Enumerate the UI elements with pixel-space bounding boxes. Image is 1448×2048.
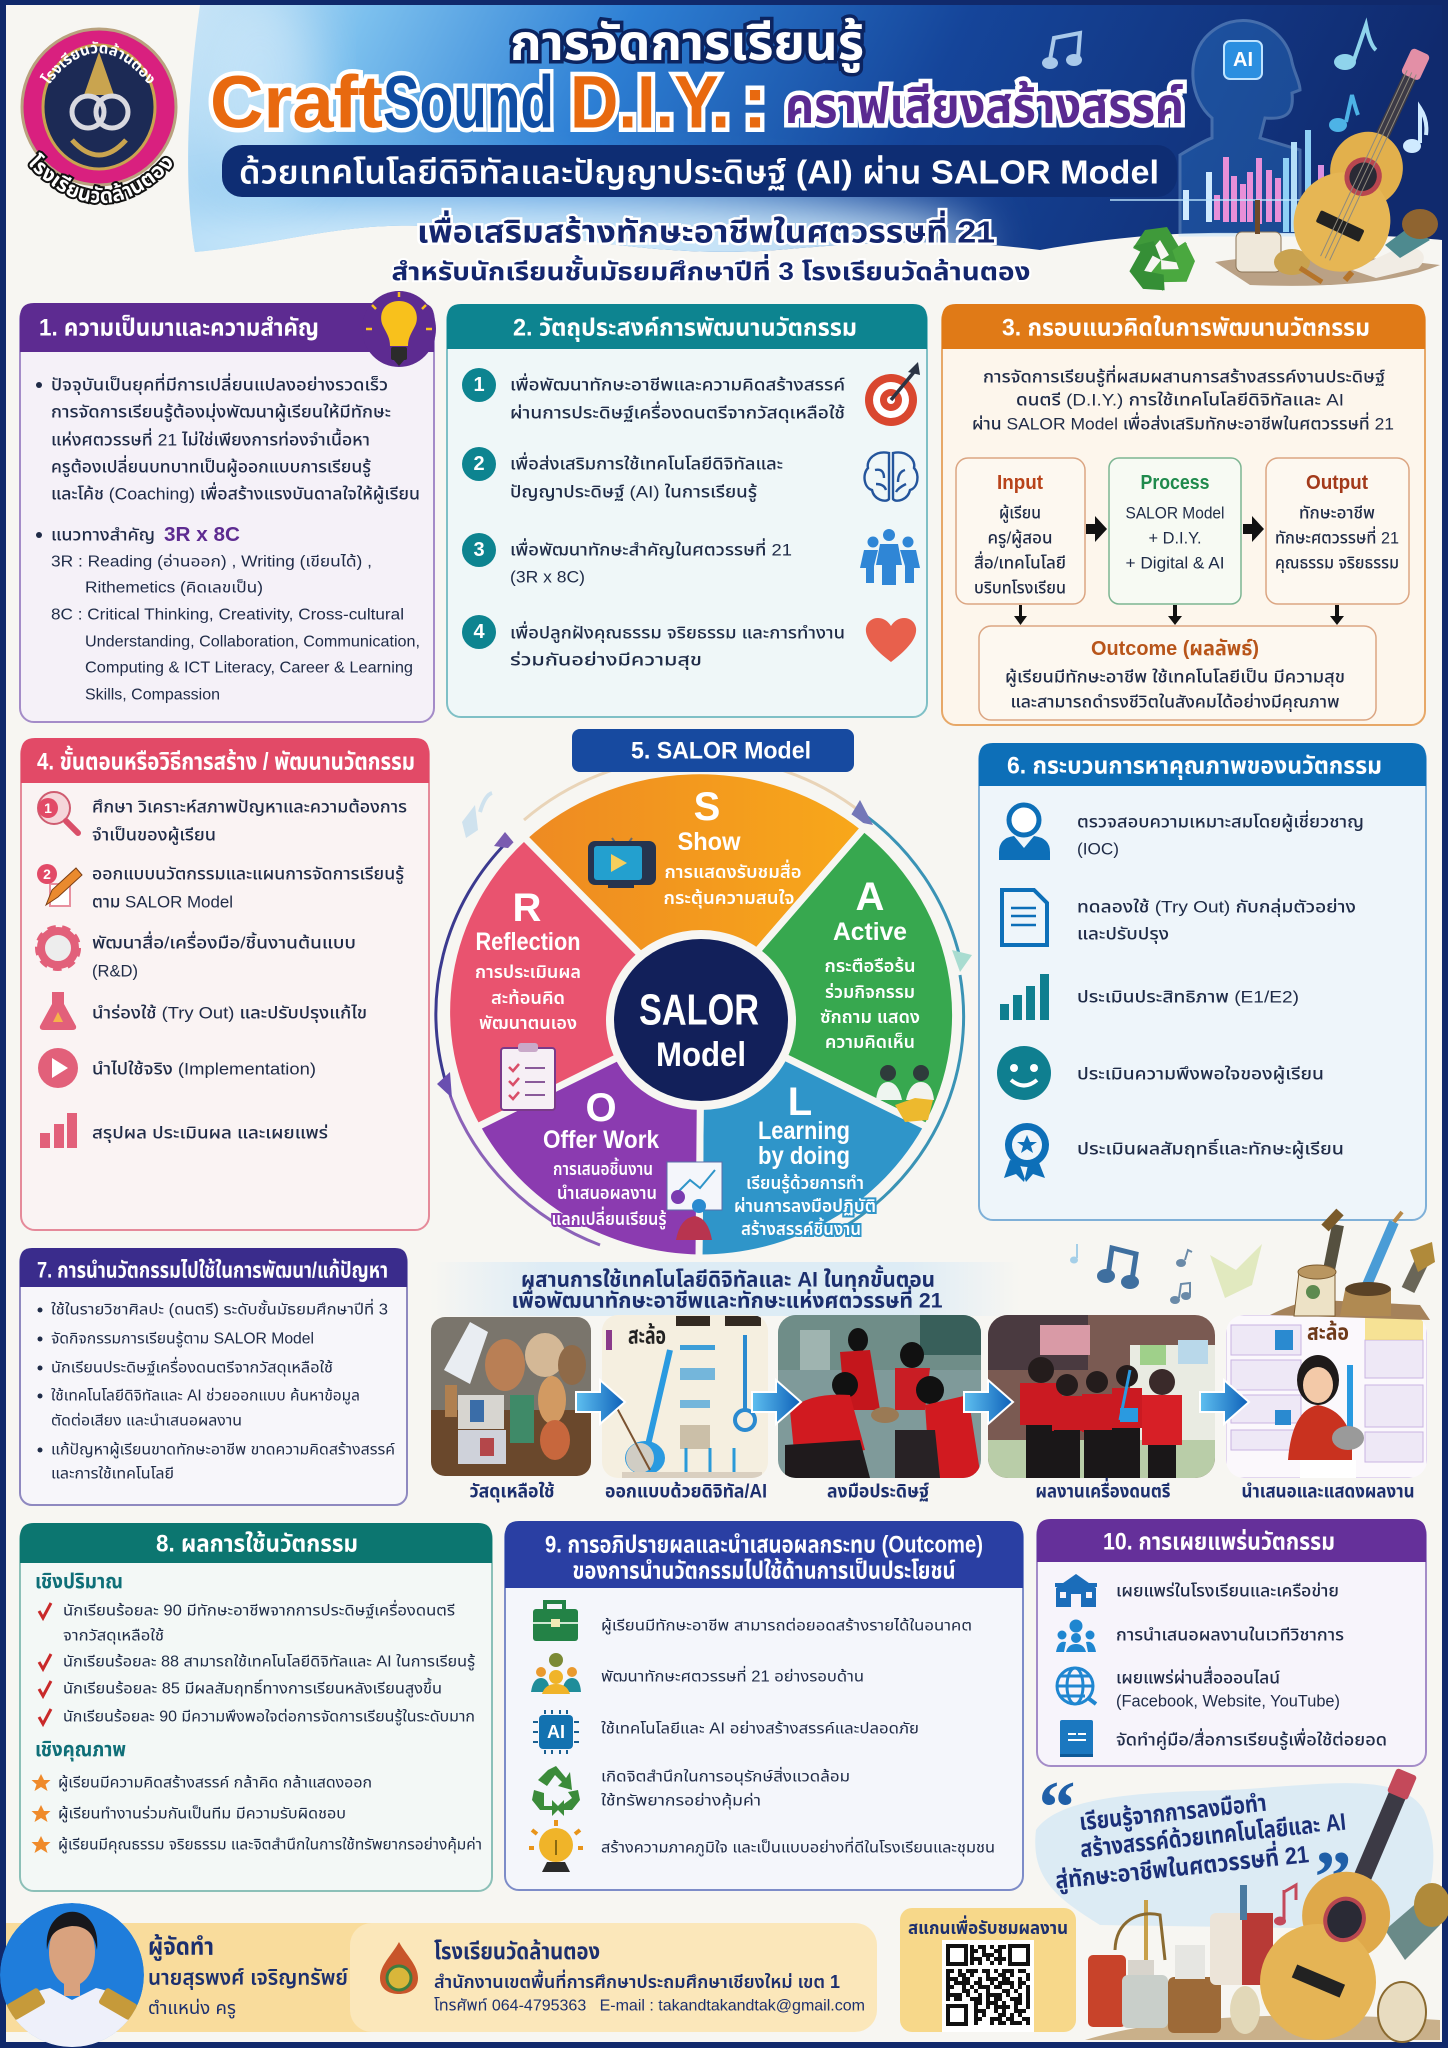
process box: + Digital & AI: [1126, 554, 1224, 572]
item presentation: [1056, 1620, 1344, 1652]
wedge O: Offer Work: Offer Work: [543, 1126, 659, 1154]
recycle symbol: [1119, 227, 1204, 301]
output box: ทักษะศตวรรษที่ 21: [1275, 525, 1399, 548]
panel 10 header: [1037, 1519, 1426, 1562]
check 1: [999, 805, 1364, 860]
step 3: (R&D): [92, 962, 138, 980]
qualitative results: ผู้เรียนทำงานร่วมกันเป็นทีม มีความรับผิดชอบ: [58, 1804, 346, 1822]
quantitative results: นักเรียนร้อยละ 90 มีความพึงพอใจต่อการจัดการเรียนรู้ในระดับมาก: [63, 1708, 475, 1726]
input box: ครู/ผู้สอน: [988, 528, 1052, 550]
panel 3 intro: ดนตรี (D.I.Y.) การใช้เทคโนโลยีดิจิทัลและ AI: [1016, 390, 1344, 410]
photo: finished instruments: [988, 1315, 1215, 1478]
wedge R: Reflection: R: [513, 886, 542, 930]
outcome 3: AI: [547, 1722, 565, 1742]
icon: clipboard: [501, 1043, 555, 1110]
wedge L: Learning by doing: ผ่านการลงมือปฏิบัติ: [734, 1196, 876, 1216]
panel 3 intro: ผ่าน SALOR Model เพื่อส่งเสริมทักษะอาชีพในศตวรรษที่ 21: [972, 411, 1394, 434]
QR label: สแกนเพื่อรับชมผลงาน: [908, 1915, 1068, 1938]
wedge A: Active: กระตือรือร้น: [824, 956, 916, 976]
school logo: โรงเรียนวัดล้านตอง: [28, 150, 174, 206]
outcome 4: [532, 1766, 850, 1816]
header background: [188, 5, 1442, 252]
panel 3 intro: [972, 364, 1394, 434]
wedge A: Active: Active: [833, 918, 907, 946]
icon: heart: [866, 618, 916, 662]
wedge O: Offer Work: นำเสนอผลงาน: [557, 1183, 657, 1203]
center hub: SALOR: [639, 986, 759, 1034]
panel 2 header: [447, 304, 927, 349]
quantitative results: เชิงปริมาณ: [35, 1571, 123, 1593]
maker credit: ผู้จัดทำ: [148, 1932, 214, 1962]
quote area: [1035, 1767, 1433, 1930]
qualitative results: เชิงคุณภาพ: [35, 1739, 126, 1761]
photo: students making: [778, 1315, 981, 1478]
quantitative results: นักเรียนร้อยละ 90 มีทักษะอาชีพจากการประดิษฐ์เครื่องดนตรี: [63, 1600, 455, 1620]
wedge S: Show: Show: [678, 828, 741, 856]
outcome box: ผู้เรียนมีทักษะอาชีพ ใช้เทคโนโลยีเป็น มีความสุข: [1005, 666, 1345, 688]
craft objects: [1215, 200, 1440, 286]
item online: (Facebook, Website, YouTube): [1116, 1692, 1340, 1710]
arrows between steps: [576, 1380, 1249, 1424]
input box: Input: [997, 472, 1043, 494]
panel 7 list: แก้ปัญหาผู้เรียนขาดทักษะอาชีพ ขาดความคิดสร้างสรรค์: [51, 1442, 395, 1458]
wedge A: Active: ร่วมกิจกรรม: [825, 982, 915, 1002]
panel 7 list: จัดกิจกรรมการเรียนรู้ตาม SALOR Model: [51, 1330, 314, 1348]
cycle ring: [436, 756, 964, 1245]
quote marks: [1038, 1767, 1352, 1919]
objective 1: เพื่อพัฒนาทักษะอาชีพและความคิดสร้างสรรค์: [510, 372, 845, 394]
school contact: [434, 1938, 865, 2014]
panel 5 title: 5. SALOR Model: [631, 738, 811, 764]
item presentation: การนำเสนอผลงานในเวทีวิชาการ: [1116, 1625, 1344, 1644]
subtitle line 3: สำหรับนักเรียนชั้นมัธยมศึกษาปีที่ 3 โรงเรียนวัดล้านตอง: [392, 254, 1030, 286]
wedge R: Reflection: สะท้อนคิด: [491, 988, 565, 1008]
icon: brain: [865, 452, 917, 501]
strip captions: วัสดุเหลือใช้: [470, 1481, 554, 1502]
main title: :: [743, 60, 767, 144]
panel 7 header: [20, 1248, 407, 1287]
QR panel: [900, 1908, 1076, 2032]
strip captions: ลงมือประดิษฐ์: [827, 1482, 929, 1502]
panel 7 list: [38, 1298, 395, 1482]
wedge L: Learning by doing: by doing: [758, 1142, 850, 1170]
school contact: สำนักงานเขตพื้นที่การศึกษาประถมศึกษาเชียงใหม่ เขต 1: [434, 1969, 840, 1992]
panel 1 guideline 3R x 8C: 3R x 8C: [164, 524, 240, 546]
main title: Sound: [383, 60, 554, 144]
check 1: (IOC): [1077, 840, 1119, 858]
panel 9 title: ของการนำนวัตกรรมไปใช้ด้านการเป็นประโยชน์: [572, 1556, 956, 1584]
guitar: [1277, 31, 1448, 288]
wedge L: Learning by doing: [699, 1016, 927, 1258]
output box: คุณธรรม จริยธรรม: [1275, 554, 1399, 573]
objective 2: เพื่อส่งเสริมการใช้เทคโนโลยีดิจิทัลและ: [510, 452, 783, 474]
recycled instruments illustration: [1085, 1749, 1448, 2048]
school logo: โรงเรียนวัดล้านตอง: [40, 41, 154, 84]
photo: digital design: [602, 1315, 768, 1478]
panel 1 guideline 3R x 8C: 8C : Critical Thinking, Creativity, Cross-cultural: [51, 606, 404, 624]
step 3: พัฒนาสื่อ/เครื่องมือ/ชิ้นงานต้นแบบ: [92, 930, 356, 952]
outcome box: และสามารถดำรงชีวิตในสังคมได้อย่างมีคุณภาพ: [1010, 692, 1340, 712]
school contact: โทรศัพท์ 064-4795363 E-mail : takandtakandtak@gmail.com: [434, 1998, 865, 2014]
step 2: ตาม SALOR Model: [92, 892, 233, 912]
check 2: ทดลองใช้ (Try Out) กับกลุ่มตัวอย่าง: [1077, 897, 1356, 918]
item manual: จัดทำคู่มือ/สื่อการเรียนรู้เพื่อใช้ต่อยอด: [1116, 1728, 1387, 1752]
panel 6 title: 6. กระบวนการหาคุณภาพของนวัตกรรม: [1007, 752, 1382, 780]
music notes: [1042, 25, 1426, 153]
QR code: [942, 1940, 1034, 2032]
panel 1 guideline 3R x 8C: 3R : Reading (อ่านออก) , Writing (เขียนได้) ,: [51, 552, 372, 570]
wedge A: Active: ความคิดเห็น: [825, 1032, 915, 1052]
objective 3: (3R x 8C): [510, 568, 585, 586]
panel 6: quality process: [979, 743, 1426, 1220]
panel 1 guideline 3R x 8C: แนวทางสำคัญ: [51, 526, 155, 544]
objective 1: [462, 368, 845, 424]
qualitative results: ผู้เรียนมีความคิดสร้างสรรค์ กล้าคิด กล้าแสดงออก: [58, 1774, 372, 1792]
quote marks: ”: [1314, 1837, 1352, 1919]
process box: Process: [1140, 472, 1210, 494]
wedge O: Offer Work: O: [585, 1086, 617, 1130]
strip heading: เพื่อพัฒนาทักษะอาชีพและทักษะแห่งศตวรรษที่ 21: [512, 1285, 943, 1312]
panel 8 title: 8. ผลการใช้นวัตกรรม: [156, 1530, 358, 1558]
step 6: สรุปผล ประเมินผล และเผยแพร่: [92, 1124, 328, 1144]
photo: digital design: สะล้อ: [628, 1322, 666, 1350]
strip captions: ผลงานเครื่องดนตรี: [1036, 1478, 1171, 1502]
quantitative results: นักเรียนร้อยละ 85 มีผลสัมฤทธิ์ทางการเรียนหลังเรียนสูงขึ้น: [63, 1678, 442, 1698]
ring arrowheads: [437, 793, 972, 1098]
quote text: สร้างสรรค์ด้วยเทคโนโลยีและ AI: [1079, 1808, 1347, 1863]
panel 4 title: 4. ขั้นตอนหรือวิธีการสร้าง / พัฒนานวัตกรรม: [37, 745, 415, 776]
panel 1 header: [20, 303, 434, 352]
step 2: 2: [43, 866, 51, 882]
outcome 5: สร้างความภาคภูมิใจ และเป็นแบบอย่างที่ดีในโรงเรียนและชุมชน: [601, 1836, 995, 1856]
emblem: [380, 1942, 418, 1994]
main title: Craft: [210, 60, 383, 144]
check 2: [1002, 890, 1356, 945]
panel 8 header: [20, 1523, 492, 1563]
school logo: [20, 28, 178, 206]
output box: Output: [1306, 472, 1368, 494]
subtitle pill: [222, 145, 1177, 197]
quote marks: “: [1038, 1767, 1076, 1849]
process strip: [430, 1212, 1435, 1502]
subtitle line 2: เพื่อเสริมสร้างทักษะอาชีพในศตวรรษที่ 21: [417, 209, 995, 250]
strip captions: [470, 1478, 1414, 1502]
AI head illustration: AI: [1233, 49, 1253, 71]
panel 2: objectives: [447, 304, 927, 717]
panel 5 title: [572, 729, 854, 772]
panel 1 paragraph: แห่งศตวรรษที่ 21 ไม่ใช่เพียงการท่องจำเนื้อหา: [51, 427, 370, 450]
panel 1 guideline 3R x 8C: [36, 524, 420, 704]
outcome 2: [531, 1653, 864, 1694]
wedge S: Show: [524, 771, 864, 1016]
step 3: [38, 928, 356, 980]
step 2: ออกแบบนวัตกรรมและแผนการจัดการเรียนรู้: [92, 864, 405, 886]
maker credit: นายสุรพงศ์ เจริญทรัพย์: [148, 1966, 348, 1990]
input box: ผู้เรียน: [999, 502, 1041, 524]
panel 4: development steps: [21, 738, 429, 1230]
wedge L: Learning by doing: เรียนรู้ด้วยการทำ: [746, 1173, 864, 1194]
portrait: [0, 1903, 144, 2047]
wedge A: Active: ซักถาม แสดง: [820, 1007, 920, 1027]
step 5: [38, 1048, 316, 1088]
main title: คราฟเสียงสร้างสรรค์: [785, 78, 1184, 134]
wedge O: Offer Work: การเสนอชิ้นงาน: [553, 1157, 653, 1179]
panel 1: background and importance: [20, 291, 436, 722]
panel 3 title: 3. กรอบแนวคิดในการพัฒนานวัตกรรม: [1002, 314, 1370, 342]
wedge S: Show: กระตุ้นความสนใจ: [664, 888, 794, 909]
wedge L: Learning by doing: สร้างสรรค์ชิ้นงาน: [741, 1217, 861, 1239]
check 4: [997, 1046, 1324, 1100]
step 1: 1: [44, 800, 52, 816]
panel 1 guideline 3R x 8C: Rithemetics (คิดเลขเป็น): [85, 578, 263, 596]
wedge R: Reflection: Reflection: [476, 928, 580, 956]
panel 8: results: [20, 1523, 492, 1891]
wedge A: Active: [701, 828, 956, 1127]
objective 3: เพื่อพัฒนาทักษะสำคัญในศตวรรษที่ 21: [510, 537, 792, 560]
wedge R: Reflection: พัฒนาตนเอง: [479, 1013, 577, 1033]
process box: SALOR Model: [1126, 504, 1224, 522]
wedge L: Learning by doing: L: [788, 1080, 812, 1124]
objective 3: 3: [473, 539, 485, 561]
objective 2: [462, 447, 783, 504]
panel 3 intro: การจัดการเรียนรู้ที่ผสมผสานการสร้างสรรค์งานประดิษฐ์: [983, 364, 1385, 388]
wedge O: Offer Work: [477, 1016, 701, 1258]
step 1: ศึกษา วิเคราะห์สภาพปัญหาและความต้องการ: [92, 796, 407, 816]
panel 7 list: นักเรียนประดิษฐ์เครื่องดนตรีจากวัสดุเหลือใช้: [51, 1356, 333, 1376]
objective 1: 1: [473, 374, 485, 396]
objective 4: เพื่อปลูกฝังคุณธรรม จริยธรรม และการทำงาน: [510, 620, 845, 644]
panel 7 list: ตัดต่อเสียง และนำเสนอผลงาน: [51, 1412, 242, 1430]
objective 2: 2: [473, 453, 485, 475]
check 3: ประเมินประสิทธิภาพ (E1/E2): [1077, 988, 1299, 1006]
school contact: โรงเรียนวัดล้านตอง: [434, 1938, 600, 1964]
wedge R: Reflection: [447, 837, 701, 1127]
panel 2 title: 2. วัตถุประสงค์การพัฒนานวัตกรรม: [513, 314, 857, 342]
item online: เผยแพร่ผ่านสื่อออนไลน์: [1116, 1666, 1280, 1688]
footer guitar: [1242, 1749, 1448, 2048]
panel 6 header: [979, 743, 1426, 786]
step 1: จำเป็นของผู้เรียน: [92, 824, 216, 846]
step 6: [40, 1113, 328, 1148]
outcome 1: ผู้เรียนมีทักษะอาชีพ สามารถต่อยอดสร้างรายได้ในอนาคต: [601, 1616, 972, 1634]
panel 5: SALOR model wheel: [436, 729, 972, 1258]
outcome 3: [533, 1710, 919, 1754]
wedge L: Learning by doing: Learning: [758, 1117, 850, 1145]
panel 7 list: ใช้ในรายวิชาศิลปะ (ดนตรี) ระดับชั้นมัธยมศึกษาปีที่ 3: [51, 1298, 388, 1318]
icon: students: [876, 1065, 934, 1122]
panel 9 title: [545, 1532, 983, 1584]
maker credit: ตำแหน่ง ครู: [148, 1998, 236, 2020]
panel 7: implementation: [20, 1248, 407, 1505]
check 4: ประเมินความพึงพอใจของผู้เรียน: [1077, 1064, 1324, 1086]
check 5: [1004, 1123, 1344, 1182]
objective 2: ปัญญาประดิษฐ์ (AI) ในการเรียนรู้: [510, 482, 758, 504]
quantitative results: จากวัสดุเหลือใช้: [63, 1628, 164, 1644]
panel 1 paragraph: การจัดการเรียนรู้ต้องมุ่งพัฒนาผู้เรียนให้มีทักษะ: [51, 402, 391, 424]
panel 7 title: 7. การนำนวัตกรรมไปใช้ในการพัฒนา/แก้ปัญหา: [37, 1258, 388, 1282]
panel 1 title: 1. ความเป็นมาและความสำคัญ: [39, 314, 319, 342]
subtitle pill: ด้วยเทคโนโลยีดิจิทัลและปัญญาประดิษฐ์ (AI) ผ่าน SALOR Model: [239, 154, 1159, 190]
quantitative results: นักเรียนร้อยละ 88 สามารถใช้เทคโนโลยีดิจิทัลและ AI ในการเรียนรู้: [63, 1654, 476, 1670]
panel 10: dissemination: [1037, 1519, 1426, 1766]
outcome 1: [533, 1602, 972, 1641]
panel 9 title: 9. การอภิปรายผลและนำเสนอผลกระทบ (Outcome): [545, 1532, 983, 1558]
process box: + D.I.Y.: [1148, 528, 1202, 548]
outcome 4: เกิดจิตสำนึกในการอนุรักษ์สิ่งแวดล้อม: [601, 1766, 850, 1786]
panel 1 paragraph: ปัจจุบันเป็นยุคที่มีการเปลี่ยนแปลงอย่างรวดเร็ว: [51, 372, 388, 396]
footer drum: [1378, 1982, 1426, 2042]
objective 1: ผ่านการประดิษฐ์เครื่องดนตรีจากวัสดุเหลือใช้: [510, 400, 845, 424]
panel 7 list: ใช้เทคโนโลยีดิจิทัลและ AI ช่วยออกแบบ ค้นหาข้อมูล: [51, 1387, 360, 1404]
photo: presentation poster: สะล้อ: [1307, 1320, 1349, 1344]
check 2: และปรับปรุง: [1077, 924, 1169, 944]
step 5: นำไปใช้จริง (Implementation): [92, 1059, 316, 1078]
framework arrows: [1014, 516, 1344, 625]
quote text: สู่ทักษะอาชีพในศตวรรษที่ 21: [1053, 1837, 1310, 1896]
instruments illustration: [1270, 1212, 1435, 1320]
strip captions: ออกแบบด้วยดิจิทัล/AI: [605, 1480, 767, 1502]
objective 3: [462, 533, 792, 586]
quote text: [1053, 1789, 1347, 1896]
icon: light bulb: [362, 291, 436, 367]
title line 1: การจัดการเรียนรู้: [510, 15, 864, 73]
step 1: [38, 792, 407, 846]
qualitative results: ผู้เรียนมีคุณธรรม จริยธรรม และจิตสำนึกในการใช้ทรัพยากรอย่างคุ้มค่า: [58, 1836, 482, 1854]
strip captions: นำเสนอและแสดงผลงาน: [1242, 1482, 1414, 1502]
strip heading: [430, 1262, 1020, 1316]
panel 9: outcome: [505, 1521, 1023, 1890]
wedge R: Reflection: การประเมินผล: [475, 962, 581, 982]
check 5: ประเมินผลสัมฤทธิ์และทักษะผู้เรียน: [1077, 1138, 1344, 1160]
footer band: [0, 1903, 877, 2047]
main title: [210, 60, 1184, 144]
icon: tv: [588, 838, 656, 888]
input box: [956, 458, 1085, 604]
step 4: [40, 992, 367, 1030]
wedge O: Offer Work: แลกเปลี่ยนเรียนรู้: [552, 1206, 666, 1230]
main title: D.I.Y.: [570, 60, 730, 144]
panel 1 guideline 3R x 8C: Skills, Compassion: [85, 686, 220, 704]
process box: [1109, 458, 1241, 604]
icon: people: [860, 529, 920, 585]
outcome box: Outcome (ผลลัพธ์): [1091, 638, 1259, 660]
objective 4: [462, 615, 845, 670]
icon: target: [865, 362, 920, 426]
panel 4 header: [21, 738, 429, 783]
outcome 3: ใช้เทคโนโลยีและ AI อย่างสร้างสรรค์และปลอดภัย: [601, 1720, 919, 1738]
wedge S: Show: S: [694, 785, 720, 829]
decorative notes: [1070, 1244, 1262, 1304]
photo: presentation poster: [1226, 1315, 1427, 1478]
item school: เผยแพร่ในโรงเรียนและเครือข่าย: [1116, 1581, 1339, 1600]
objective 4: 4: [473, 621, 485, 643]
panel 1 paragraph: ครูต้องเปลี่ยนบทบาทเป็นผู้ออกแบบการเรียนรู้: [51, 454, 372, 478]
item manual: [1060, 1720, 1387, 1757]
check 1: ตรวจสอบความเหมาะสมโดยผู้เชี่ยวชาญ: [1077, 810, 1364, 834]
outcome box: [979, 626, 1376, 720]
step 2: [37, 864, 405, 912]
strip heading: ผสานการใช้เทคโนโลยีดิจิทัลและ AI ในทุกขั้นตอน: [521, 1265, 935, 1292]
panel 1 guideline 3R x 8C: Computing & ICT Literacy, Career & Learning: [85, 660, 413, 676]
input box: สื่อ/เทคโนโลยี: [974, 550, 1066, 572]
panel 1 guideline 3R x 8C: Understanding, Collaboration, Communication,: [85, 634, 420, 650]
panel 7 list: และการใช้เทคโนโลยี: [51, 1466, 174, 1482]
quantitative results: [35, 1571, 476, 1726]
cans: [1088, 1883, 1448, 2034]
panel 10 title: 10. การเผยแพร่นวัตกรรม: [1103, 1528, 1335, 1556]
outcome 4: ใช้ทรัพยากรอย่างคุ้มค่า: [601, 1792, 761, 1810]
panel 1 paragraph: [36, 372, 420, 506]
output box: ทักษะอาชีพ: [1299, 504, 1375, 522]
item school: [1055, 1574, 1339, 1607]
qualitative results: [32, 1739, 482, 1854]
outcome 5: [529, 1820, 995, 1872]
item online: [1057, 1666, 1340, 1710]
panel 3 header: [942, 304, 1425, 349]
wedge A: Active: A: [856, 875, 884, 919]
AI head illustration: [1180, 21, 1300, 235]
sound bars: [1110, 130, 1324, 232]
objective 4: ร่วมกันอย่างมีความสุข: [510, 650, 702, 670]
wedge S: Show: การแสดงรับชมสื่อ: [664, 859, 802, 882]
center hub: Model: [656, 1036, 746, 1074]
center hub: [606, 930, 796, 1110]
header banner: [20, 5, 1442, 291]
panel 3: conceptual framework: [942, 304, 1425, 725]
icon: presentation: [667, 1162, 722, 1240]
maker credit: [148, 1932, 348, 2020]
quote background blob: [1035, 1783, 1433, 1930]
step 4: นำร่องใช้ (Try Out) และปรับปรุงแก้ไข: [92, 1002, 367, 1024]
outcome 2: พัฒนาทักษะศตวรรษที่ 21 อย่างรอบด้าน: [601, 1666, 864, 1686]
output box: [1266, 458, 1409, 604]
check 3: [1000, 974, 1299, 1020]
quote text: เรียนรู้จากการลงมือทำ: [1078, 1789, 1268, 1837]
panel 1 paragraph: และโค้ช (Coaching) เพื่อสร้างแรงบันดาลใจให้ผู้เรียน: [51, 482, 420, 506]
input box: บริบทโรงเรียน: [974, 578, 1066, 598]
photo: recycled materials: [431, 1317, 591, 1476]
panel 9 header: [505, 1521, 1023, 1588]
